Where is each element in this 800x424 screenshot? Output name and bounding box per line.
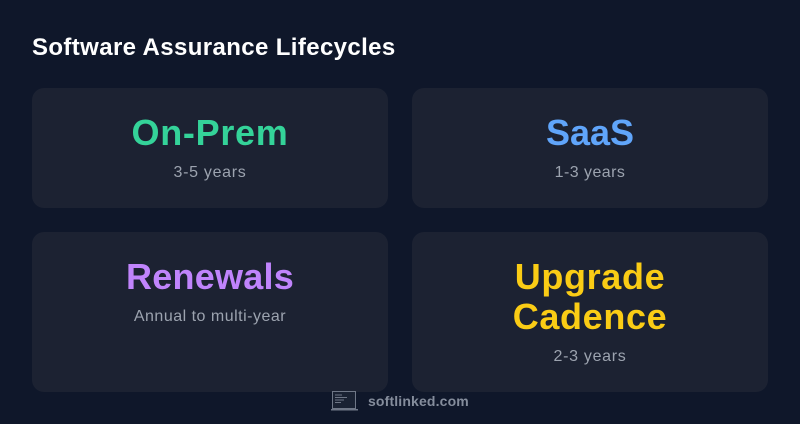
heading: Renewals: Renewals [126,256,294,297]
panel: SaaS [412,88,768,208]
text: On-Prem duration: 3-5 years [174,164,246,181]
text: Upgrade Cadence duration: 2-3 years [554,348,626,365]
heading: Upgrade Cadence: Upgrade [515,256,665,297]
title: Software Assurance Lifecycles [32,34,396,61]
heading: Upgrade Cadence: Cadence [513,296,667,337]
heading: Upgrade Cadence [513,256,667,337]
heading: SaaS: SaaS [546,112,634,153]
heading: On-Prem: On-Prem [132,112,288,153]
panel: On-Prem [32,88,388,208]
panel: Renewals [32,232,388,392]
text: softlinked.com: softlinked.com [368,393,469,409]
panel: Upgrade Cadence [412,232,768,392]
footer logo [331,391,469,410]
text: SaaS duration: 1-3 years [555,164,625,181]
text: Renewals duration: Annual to multi-year [134,308,286,325]
icon: laptop [331,391,358,410]
